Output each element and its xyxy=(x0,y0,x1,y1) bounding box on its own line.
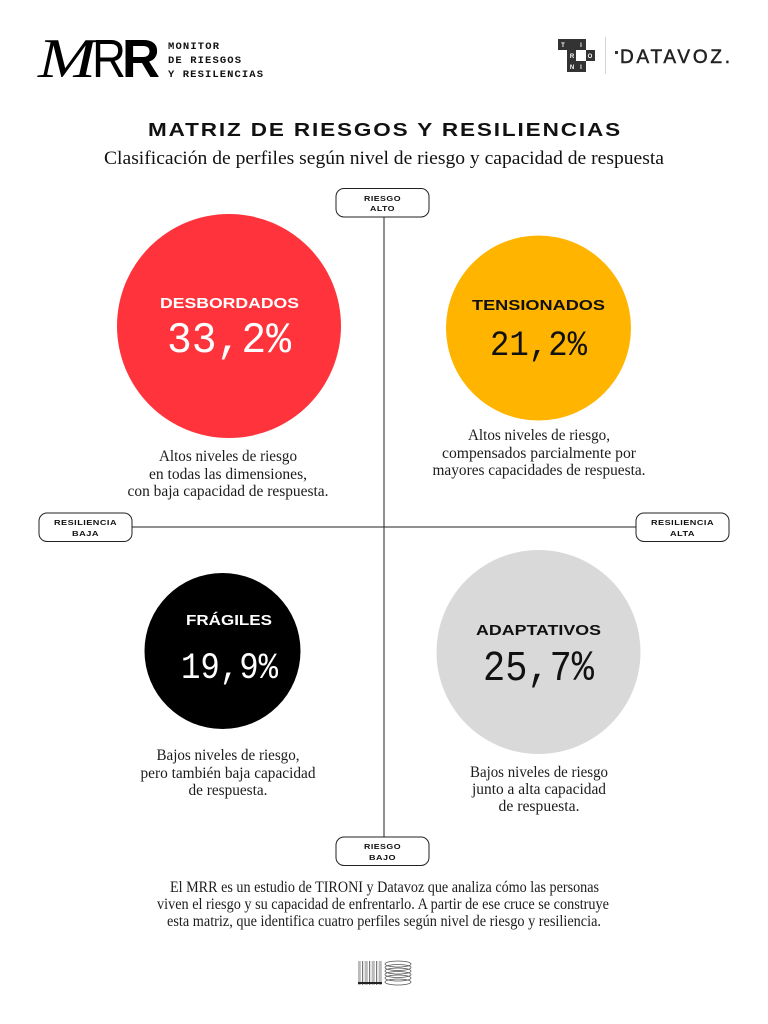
axis label: resiliencia alta xyxy=(636,513,729,542)
description: desbordados: en todas las dimensiones, xyxy=(149,466,307,483)
logo: Tironi: O xyxy=(588,54,593,60)
logo: Datavoz: DATAVOZ. xyxy=(620,47,730,68)
logo: Datavoz xyxy=(605,37,730,74)
logo: Monitor de Riesgos y Resilencias: DE RIESGOS xyxy=(168,55,241,67)
description: tensionados xyxy=(432,427,646,479)
panel: tensionados: TENSIONADOS xyxy=(472,298,605,314)
axis label: riesgo bajo: BAJO xyxy=(369,853,396,862)
axis label: resiliencia baja: RESILIENCIA xyxy=(54,518,117,527)
panel: adaptativos xyxy=(436,550,640,815)
logo: Tironi: T xyxy=(561,43,565,49)
description: tensionados: mayores capacidades de respuesta. xyxy=(432,462,646,479)
logo: Tironi: N xyxy=(570,65,574,71)
logo: Tironi: I xyxy=(580,65,582,71)
logo: Tironi: R xyxy=(570,54,575,60)
description: desbordados: con baja capacidad de respuesta. xyxy=(128,483,328,500)
panel: desbordados: 33,2% xyxy=(167,316,292,366)
panel: desbordados: DESBORDADOS xyxy=(160,296,299,312)
panel: fragiles: FRÁGILES xyxy=(186,612,272,629)
logo: Tironi xyxy=(558,39,595,72)
description: fragiles: pero también baja capacidad xyxy=(140,765,316,782)
logo: Monitor de Riesgos y Resilencias: Y RESILENCIAS xyxy=(168,69,263,81)
logo: Monitor de Riesgos y Resilencias: MONITOR xyxy=(168,41,220,53)
footer text: esta matriz, que identifica cuatro perfiles según nivel de riesgo y resiliencia. xyxy=(167,913,601,930)
description: adaptativos: Bajos niveles de riesgo xyxy=(470,764,608,781)
axis label: riesgo bajo xyxy=(336,837,429,866)
subtitle: Clasificación de perfiles según nivel de riesgo y capacidad de respuesta xyxy=(104,148,665,169)
description: desbordados xyxy=(128,448,328,500)
description: tensionados: Altos niveles de riesgo, xyxy=(468,427,610,444)
logo: Tironi: I xyxy=(580,43,582,49)
logo: Monitor de Riesgos y Resilencias: R xyxy=(92,29,126,89)
panel: adaptativos: 25,7% xyxy=(483,644,594,693)
description: adaptativos: de respuesta. xyxy=(498,798,580,815)
logo: Monitor de Riesgos y Resilencias: R xyxy=(122,29,160,89)
footer text xyxy=(157,879,609,930)
description: adaptativos xyxy=(470,764,608,815)
logo: Monitor de Riesgos y Resilencias: M xyxy=(37,28,100,90)
matrix axes xyxy=(132,217,636,837)
footer text: viven el riesgo y su capacidad de enfrentarlo. A partir de ese cruce se construye xyxy=(157,896,609,913)
panel: tensionados: 21,2% xyxy=(490,326,588,366)
axis label: resiliencia alta: RESILIENCIA xyxy=(651,518,714,527)
description: desbordados: Altos niveles de riesgo xyxy=(159,448,297,465)
panel: desbordados xyxy=(117,214,341,500)
icon: bottom emblem xyxy=(358,961,411,985)
axis label: resiliencia baja: BAJA xyxy=(72,529,99,538)
description: fragiles: Bajos niveles de riesgo, xyxy=(156,747,300,764)
axis label: riesgo alto: ALTO xyxy=(370,204,395,213)
logo: Monitor de Riesgos y Resilencias xyxy=(37,28,263,90)
panel: fragiles xyxy=(140,573,316,799)
title: MATRIZ DE RIESGOS Y RESILIENCIAS xyxy=(148,120,622,140)
description: adaptativos: junto a alta capacidad xyxy=(471,781,606,798)
description: fragiles xyxy=(140,747,316,799)
axis label: resiliencia alta: ALTA xyxy=(670,529,695,538)
axis label: resiliencia baja xyxy=(39,513,132,542)
axis label: riesgo alto xyxy=(336,188,429,217)
axis label: riesgo alto: RIESGO xyxy=(364,194,401,203)
panel: adaptativos: ADAPTATIVOS xyxy=(476,623,601,639)
footer text: El MRR es un estudio de TIRONI y Datavoz que analiza cómo las personas xyxy=(170,879,599,896)
axis label: riesgo bajo: RIESGO xyxy=(364,842,401,851)
panel: tensionados xyxy=(432,236,646,479)
description: fragiles: de respuesta. xyxy=(188,782,268,799)
description: tensionados: compensados parcialmente por xyxy=(442,445,637,462)
panel: fragiles: 19,9% xyxy=(181,648,279,690)
